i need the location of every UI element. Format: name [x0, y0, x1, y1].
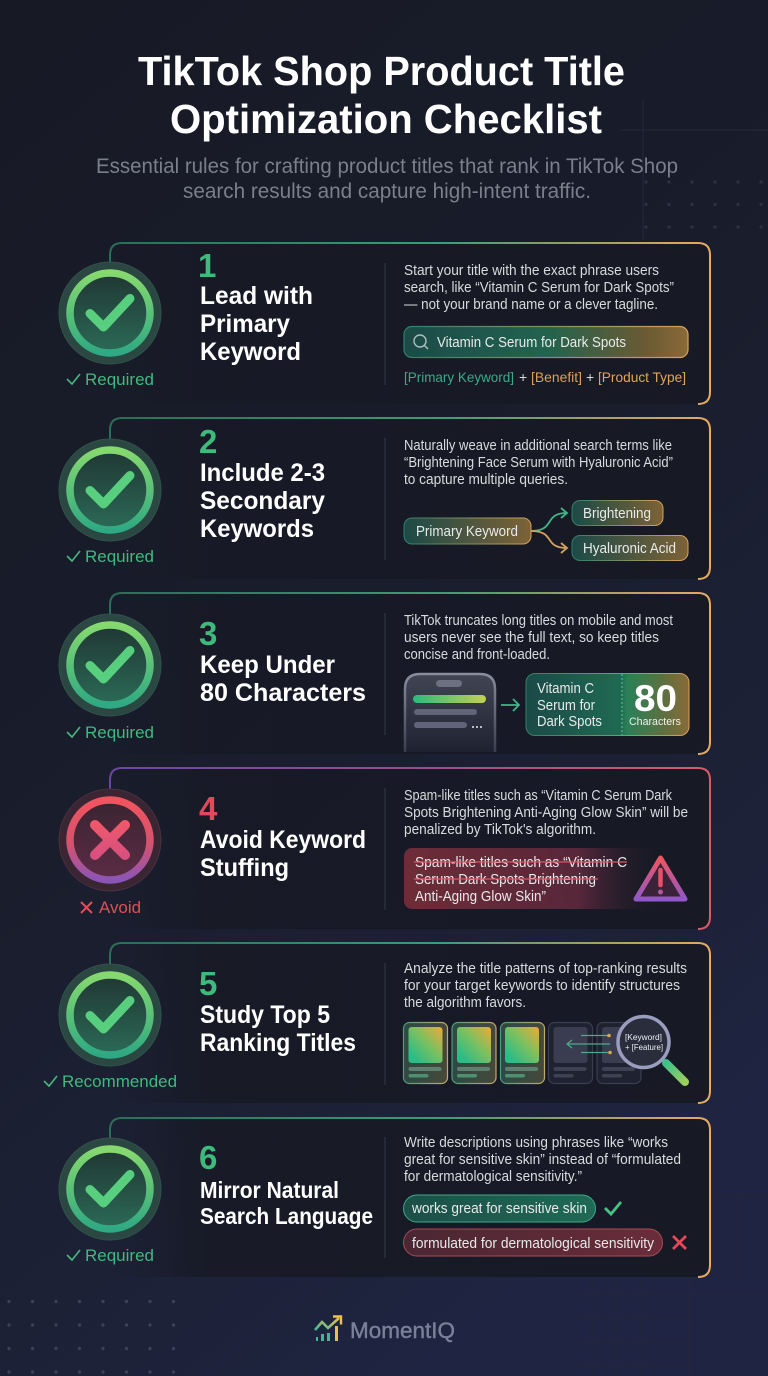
body text: for dermatological sensitivity.” [404, 1169, 582, 1185]
number 3: 3 [199, 615, 217, 652]
struck-through spam example: Anti-Aging Glow Skin” [415, 889, 546, 905]
heading: Primary [200, 310, 290, 338]
pill: brightening: Brightening [583, 506, 651, 522]
heading: Secondary [200, 487, 325, 515]
formula: + [586, 369, 594, 385]
search bar: Vitamin C Serum for Dark Spots [437, 335, 626, 351]
heading: Mirror Natural [200, 1177, 339, 1203]
icon: check badge [59, 964, 161, 1066]
heading [200, 1177, 373, 1229]
icon: magnifier: [Keyword] [625, 1033, 662, 1042]
number 4: 4 [199, 790, 218, 827]
icon: check badge [59, 439, 161, 541]
pill: primary keyword: Primary Keyword [416, 524, 518, 540]
struck-through spam example [404, 848, 654, 909]
logo: MomentIQ [315, 1316, 455, 1343]
heading: Keyword [200, 338, 301, 366]
body text: Spam-like titles such as “Vitamin C Serum Dark [404, 788, 673, 804]
heading [200, 826, 366, 882]
heading: Lead with [200, 282, 313, 310]
number 1: 1 [198, 247, 216, 284]
heading: Keywords [200, 515, 314, 543]
icon: magnifier [618, 1016, 685, 1082]
body text: “Brightening Face Serum with Hyaluronic Acid” [404, 455, 673, 471]
heading: Search Language [200, 1203, 373, 1229]
body text: users never see the full text, so keep titles [404, 630, 659, 646]
body text: — not your brand name or a clever tagline. [404, 297, 658, 313]
listing cards [404, 1022, 641, 1084]
title: Optimization Checklist [170, 96, 602, 142]
icon: check badge [59, 262, 161, 364]
subtitle: Essential rules for crafting product titles that rank in TikTok Shop [96, 155, 678, 178]
number 5: 5 [199, 965, 217, 1002]
keyword diagram [404, 500, 688, 560]
icon: search [414, 335, 428, 349]
body text [404, 438, 673, 488]
required label: Required [85, 1246, 154, 1265]
character count box: Characters [629, 716, 681, 728]
formula: [Benefit] [531, 369, 582, 385]
icon: check badge [59, 1138, 161, 1240]
pill: hyaluronic acid: Hyaluronic Acid [583, 541, 676, 557]
pill: good phrase [404, 1195, 596, 1222]
number 6: 6 [199, 1139, 217, 1176]
heading [200, 651, 366, 707]
title: TikTok Shop Product Title [138, 48, 625, 94]
heading: Keep Under [200, 651, 335, 679]
icon: growth chart [315, 1316, 341, 1341]
body text [404, 788, 688, 838]
heading: Stuffing [200, 854, 289, 882]
title [138, 48, 625, 142]
formula: [Primary Keyword] [404, 369, 514, 385]
character count box: Dark Spots [537, 714, 602, 730]
pill: hyaluronic acid [572, 536, 688, 560]
struck-through spam example: Spam-like titles such as “Vitamin C [415, 855, 627, 871]
icon: magnifier: + [Feature] [625, 1043, 663, 1052]
arrow: to hyaluronic acid [531, 531, 567, 553]
icon: x [673, 1236, 686, 1249]
icon: check [605, 1202, 621, 1214]
pill: good phrase: works great for sensitive skin [411, 1201, 587, 1217]
body text: Spots Brightening Anti-Aging Glow Skin” will be [404, 805, 688, 821]
struck-through spam example: Serum Dark Spots Brightening [415, 872, 596, 888]
arrow: to brightening [531, 508, 567, 531]
panel: rule 6 [59, 1118, 710, 1277]
panel: rule 5 [44, 943, 710, 1103]
pill: bad phrase: formulated for dermatological sensitivity [412, 1236, 655, 1252]
subtitle [96, 155, 678, 203]
heading: Study Top 5 [200, 1001, 330, 1029]
character count box: Serum for [537, 698, 595, 714]
arrow [501, 699, 519, 711]
panel: rule 2 [59, 418, 710, 579]
body text: great for sensitive skin” instead of “formulated [404, 1152, 681, 1168]
body text [404, 613, 673, 663]
search bar [404, 326, 688, 358]
pill: brightening [572, 500, 663, 526]
body text: the algorithm favors. [404, 995, 526, 1011]
body text: Start your title with the exact phrase users [404, 263, 659, 279]
character count box: Vitamin C [537, 681, 594, 697]
pill: bad phrase [404, 1229, 662, 1256]
pill: primary keyword [404, 518, 531, 544]
heading [200, 1001, 356, 1057]
heading: Include 2-3 [200, 459, 325, 487]
recommended label: Recommended [62, 1072, 177, 1091]
icon: warning triangle [636, 858, 685, 899]
body text [404, 961, 687, 1011]
heading [200, 459, 325, 543]
formula: + [519, 369, 527, 385]
body text: search, like “Vitamin C Serum for Dark Spots” [404, 280, 674, 296]
number 2: 2 [199, 423, 217, 460]
avoid label [81, 898, 141, 917]
panel: rule 1 [59, 243, 710, 404]
body text: for your target keywords to identify structures [404, 978, 680, 994]
character count box: 80 [634, 678, 677, 719]
panel: rule 3 [59, 593, 710, 754]
heading [200, 282, 313, 366]
required label: Required [85, 547, 154, 566]
heading: 80 Characters [200, 679, 366, 707]
icon: phone [405, 674, 495, 752]
heading: Avoid Keyword [200, 826, 366, 854]
body text: penalized by TikTok's algorithm. [404, 822, 596, 838]
panel: rule 4 [59, 768, 710, 929]
formula: [Product Type] [598, 369, 686, 385]
heading: Ranking Titles [200, 1029, 356, 1057]
comparison arrows [567, 1034, 612, 1054]
icon: check badge [59, 614, 161, 716]
body text: Analyze the title patterns of top-ranking results [404, 961, 687, 977]
character count box [526, 674, 689, 736]
logo: MomentIQ: MomentIQ [350, 1318, 455, 1343]
body text: Naturally weave in additional search terms like [404, 438, 672, 454]
body text: to capture multiple queries. [404, 472, 568, 488]
body text [404, 1135, 681, 1185]
formula [404, 369, 686, 385]
required label: Required [85, 370, 154, 389]
body text: concise and front-loaded. [404, 647, 550, 663]
subtitle: search results and capture high-intent traffic. [183, 180, 591, 203]
body text [404, 263, 674, 313]
body text: TikTok truncates long titles on mobile and most [404, 613, 673, 629]
avoid label: Avoid [99, 898, 141, 917]
required label: Required [85, 723, 154, 742]
body text: Write descriptions using phrases like “works [404, 1135, 668, 1151]
icon: x badge [59, 789, 161, 891]
